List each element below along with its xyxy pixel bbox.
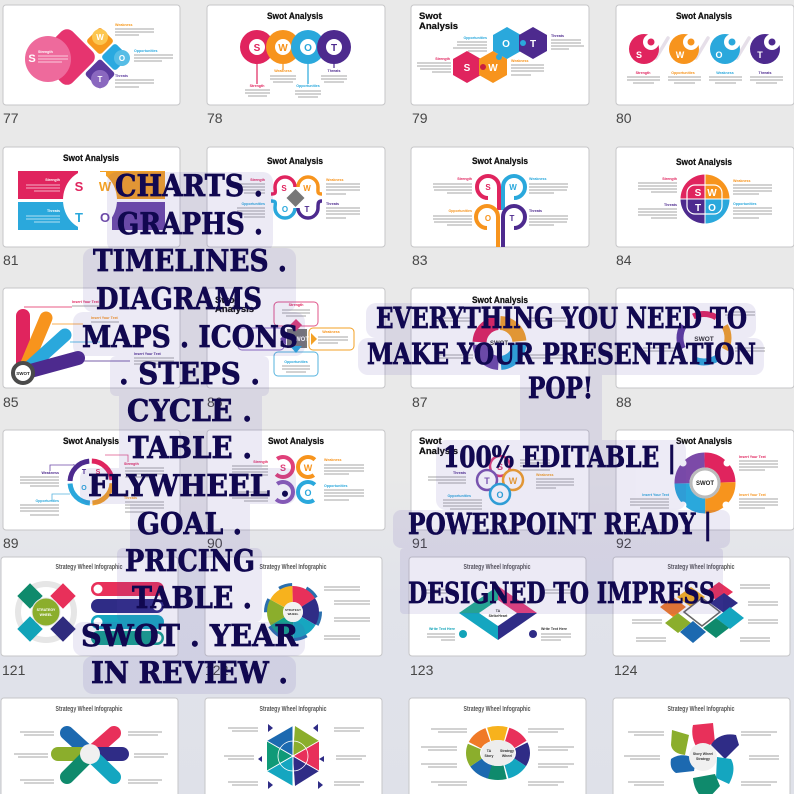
label 77: 77 [3, 110, 19, 126]
slide 81: banner quadrants: T [75, 210, 83, 225]
slide 85: swot fan: Insert Your Text [91, 316, 119, 320]
slide 82: curved swot: Opportunities [241, 202, 265, 206]
slide 90: arcs: Swot Analysis [268, 436, 324, 447]
slide 78: four linked circles: S [254, 43, 261, 54]
slide 84: quadrant circle: S [695, 188, 702, 199]
slide 90: arcs: S [280, 463, 286, 473]
slide 86: connected boxes: SWOT [291, 337, 309, 343]
slide 127: oval segments: Wheel [502, 754, 512, 758]
slide 128: swirl blades [613, 698, 790, 794]
slide 79: hexagons: Opportunities [463, 36, 487, 40]
slide 92: swot donut [616, 430, 794, 530]
slide 85: swot fan [3, 288, 180, 388]
slide 78: four linked circles: W [278, 43, 288, 54]
right headline: value proposition: POWERPOINT READY | [408, 507, 712, 541]
label 123: 123 [410, 662, 434, 678]
slide 79: hexagons: T [530, 39, 536, 50]
slide 81: banner quadrants: Strength [45, 178, 60, 182]
left headline: product contents list: DIAGRAMS [96, 281, 262, 316]
translucent highlight behind headline text [73, 172, 764, 694]
right headline: value proposition: 100% EDITABLE | [443, 440, 676, 474]
slide 127: oval segments [409, 698, 586, 794]
slide 79: hexagons: O [502, 39, 510, 50]
slide 89: ring with callouts: Strength [124, 462, 139, 466]
label 122: 122 [205, 662, 229, 678]
slide 81: banner quadrants: W [99, 179, 112, 194]
left headline: product contents list: MAPS . ICONS [82, 319, 298, 354]
slide 83: tree swirls: Weakness [529, 177, 547, 181]
slide 90: arcs: Opportunities [324, 484, 348, 488]
label 87: 87 [412, 394, 428, 410]
slide 79: hexagons: Strength [435, 57, 450, 61]
slide 84: quadrant circle: Opportunities [733, 202, 757, 206]
label 124: 124 [614, 662, 638, 678]
slide 124: tiled diamonds [613, 557, 790, 656]
slide 80: circles with arrows: S [636, 50, 642, 60]
slide 85: swot fan: SWOT [16, 371, 30, 376]
slide 89: ring with callouts: Opportunities [35, 499, 59, 503]
slide 82: curved swot: Threats [326, 202, 339, 206]
left headline: product contents list: CHARTS . [115, 168, 263, 203]
slide 83: tree swirls: Threats [529, 209, 542, 213]
slide 81: banner quadrants: S [75, 179, 84, 194]
left headline: product contents list: IN REVIEW . [91, 655, 288, 690]
label 89: 89 [3, 535, 19, 551]
slide 77: layered shapes: Strength [38, 50, 53, 54]
label 81: 81 [3, 252, 19, 268]
slide 77: layered shapes: Opportunities [134, 49, 158, 53]
slide 77: layered shapes: W [96, 33, 104, 42]
slide 83: tree swirls: Swot Analysis [472, 156, 528, 167]
slide 122: gear wheel: STRATEGY [285, 608, 301, 612]
slide 79: hexagons: Threats [551, 34, 564, 38]
slide 89: ring with callouts: Weakness [41, 471, 59, 475]
slide 78: four linked circles: Swot Analysis [267, 11, 323, 22]
left headline: product contents list: CYCLE . [127, 393, 252, 428]
slide 128: swirl blades: Strategy Wheel Infographic [668, 704, 734, 713]
slide 84: quadrant circle: W [707, 188, 717, 199]
slide 80: circles with arrows: O [715, 50, 723, 60]
slide 78: four linked circles: Strength [250, 84, 264, 88]
slide 122: gear wheel: Strategy Wheel Infographic [260, 562, 326, 571]
slide 82: curved swot: S [281, 184, 287, 193]
slide 78: four linked circles [207, 5, 385, 105]
label 121: 121 [2, 662, 26, 678]
slide 125: six petals: Strategy Wheel Infographic [56, 704, 122, 713]
slide 128: swirl blades: Story Wheel [693, 752, 713, 756]
slide 92: swot donut: Swot Analysis [676, 436, 732, 447]
slide 91: four petals: Threats [453, 471, 466, 475]
slide 80: circles with arrows: Strength [636, 71, 650, 75]
slide 88: arrows ring [616, 288, 794, 388]
slide 123: diamond frame: TA [496, 609, 501, 613]
slide 79: hexagons: W [488, 63, 498, 74]
label 79: 79 [412, 110, 428, 126]
slide 122: gear wheel: WHEEL [288, 612, 299, 616]
slide 80: circles with arrows: Opportunities [671, 71, 695, 75]
slide 78: four linked circles: Threats [328, 69, 340, 73]
left headline: product contents list: TABLE . [128, 430, 252, 465]
slide 81: banner quadrants [3, 147, 180, 247]
slide 86: connected boxes: Swot [215, 295, 239, 306]
slide 84: quadrant circle: T [695, 203, 701, 214]
slide 91: four petals: O [496, 490, 504, 500]
slide 86: connected boxes [207, 288, 385, 388]
slide 83: tree swirls: Opportunities [448, 209, 472, 213]
slide 83: tree swirls [411, 147, 589, 247]
left headline: product contents list: FLYWHEEL . [88, 468, 290, 503]
slide 86: connected boxes: Analysis [215, 304, 254, 315]
slide 123: diamond frame: StrikeHeart [489, 614, 508, 618]
left headline: product contents list: SWOT . YEAR [81, 618, 298, 653]
slide 125: six petals [1, 698, 178, 794]
slide 80: circles with arrows [616, 5, 794, 105]
slide 126: hexagon wheel: Strategy Wheel Infographic [260, 704, 326, 713]
label 84: 84 [616, 252, 632, 268]
slide 89: ring with callouts: T [82, 469, 87, 476]
left headline: product contents list: TIMELINES . [93, 243, 287, 278]
slide 77: layered shapes: T [98, 75, 103, 84]
left headline: product contents list: GOAL . [137, 506, 242, 541]
label 90: 90 [207, 535, 223, 551]
label 78: 78 [207, 110, 223, 126]
slide 87: broken donut: Swot Analysis [472, 295, 528, 306]
label 85: 85 [3, 394, 19, 410]
slide 78: four linked circles: T [331, 43, 337, 54]
label 83: 83 [412, 252, 428, 268]
slide 123: diamond frame [409, 557, 586, 656]
slide 79: hexagons: Swot [419, 11, 443, 22]
slide 86: connected boxes: Weakness [322, 330, 340, 334]
slide 77: layered shapes: O [119, 54, 125, 63]
slide 78: four linked circles: Weakness [274, 69, 292, 73]
slide 123: diamond frame: Strategy Wheel Infographic [464, 562, 530, 571]
slide 89: ring with callouts: O [81, 485, 87, 492]
slide 90: arcs: W [304, 463, 313, 473]
slide 88: arrows ring: SWOT [694, 336, 714, 343]
slide 87: broken donut: SWOT [490, 341, 508, 347]
slide 91: four petals: Swot [419, 436, 443, 447]
slide 78: four linked circles: Opportunities [296, 84, 320, 88]
slide 85: swot fan: Insert Your Text [72, 300, 100, 304]
slide 91: four petals [411, 430, 589, 530]
slide 83: tree swirls: W [509, 183, 517, 192]
slide 85: swot fan: Insert Your Text [134, 352, 162, 356]
label 88: 88 [616, 394, 632, 410]
left headline: product contents list: PRICING [125, 543, 255, 578]
slide 80: circles with arrows: Weakness [716, 71, 734, 75]
slide 82: curved swot: Swot Analysis [267, 156, 323, 167]
slide 90: arcs: O [304, 488, 312, 498]
slide 127: oval segments: TA [487, 749, 492, 753]
slide 121: strategy wheel with pills: WHEEL [40, 613, 53, 617]
slide 84: quadrant circle: Weakness [733, 179, 751, 183]
slide 84: quadrant circle: Threats [664, 203, 677, 207]
slide 89: ring with callouts [3, 430, 180, 530]
slide 127: oval segments: Strategy [500, 749, 514, 753]
slide 79: hexagons: S [464, 63, 471, 74]
slide 123: diamond frame: Write Text Here [541, 627, 567, 631]
slide 82: curved swot: Strength [250, 178, 265, 182]
slide 90: arcs: Strength [253, 460, 268, 464]
slide 124: tiled diamonds: Strategy Wheel Infographic [668, 562, 734, 571]
slide 91: four petals: Analysis [419, 446, 458, 457]
slide 82: curved swot [207, 147, 385, 247]
slide 81: banner quadrants: Threats [47, 209, 60, 213]
slide 86: connected boxes: Opportunities [284, 360, 308, 364]
slide 83: tree swirls: S [485, 183, 491, 192]
slide 83: tree swirls: T [510, 214, 515, 223]
slide 127: oval segments: Strategy Wheel Infographic [464, 704, 530, 713]
slide 79: hexagons: Weakness [511, 59, 529, 63]
right headline: value proposition: DESIGNED TO IMPRESS [408, 576, 715, 610]
left headline: product contents list: . STEPS . [119, 356, 260, 391]
slide 90: arcs: Weakness [324, 458, 342, 462]
slide 91: four petals: W [509, 476, 518, 486]
slide 80: circles with arrows: W [676, 50, 685, 60]
slide 89: ring with callouts: Threats [124, 496, 137, 500]
right headline: value proposition [367, 301, 756, 610]
slide 83: tree swirls: O [485, 214, 491, 223]
slide 90: arcs [207, 430, 385, 530]
slide 89: ring with callouts: Swot Analysis [63, 436, 119, 447]
slide 82: curved swot: W [303, 184, 311, 193]
slide 80: circles with arrows: T [757, 50, 763, 60]
slide 77: layered shapes: S [28, 53, 36, 65]
slide 79: hexagons [411, 5, 589, 105]
slide 80: circles with arrows: Swot Analysis [676, 11, 732, 22]
slide 79: hexagons: Analysis [419, 21, 458, 32]
left headline: product contents list: TABLE . [132, 580, 252, 615]
slide 91: four petals: Opportunities [447, 494, 471, 498]
slide 80: circles with arrows: Threats [759, 71, 771, 75]
slide 82: curved swot: O [282, 205, 288, 214]
slide 84: quadrant circle [616, 147, 794, 247]
slide 91: four petals: S [497, 462, 503, 472]
left headline: product contents list [81, 168, 298, 690]
slide 121: strategy wheel with pills [1, 557, 178, 656]
label 91: 91 [412, 535, 428, 551]
slide 84: quadrant circle: Swot Analysis [676, 157, 732, 168]
slide 128: swirl blades: Strategy [696, 757, 710, 761]
slide 77: layered shapes: Threats [115, 74, 128, 78]
slide 92: swot donut: SWOT [696, 481, 714, 487]
slide 81: banner quadrants: Swot Analysis [63, 153, 119, 164]
slide 82: curved swot: Weakness [326, 178, 344, 182]
slide 87: broken donut [411, 288, 589, 388]
slide 121: strategy wheel with pills: STRATEGY [37, 608, 56, 612]
slide 126: hexagon wheel [205, 698, 382, 794]
right headline: value proposition: POP! [528, 371, 593, 405]
left headline: product contents list: GRAPHS . [117, 206, 263, 241]
slide 92: swot donut: Insert Your Text [739, 493, 767, 497]
slide 92: swot donut: Insert Your Text [739, 455, 767, 459]
slide 82: curved swot: T [305, 205, 310, 214]
slide 77: layered shapes [3, 5, 180, 105]
slide 84: quadrant circle: Strength [662, 177, 677, 181]
label 92: 92 [616, 535, 632, 551]
slide 83: tree swirls: Strength [457, 177, 472, 181]
slide 86: connected boxes: Strength [289, 303, 303, 307]
slide 81: banner quadrants: O [100, 210, 110, 225]
slide 92: swot donut: Insert Your Text [642, 493, 670, 497]
slide 84: quadrant circle: O [708, 203, 716, 214]
slide 121: strategy wheel with pills: Strategy Wheel Infographic [56, 562, 122, 571]
slide 91: four petals: Weakness [536, 473, 554, 477]
slide 89: ring with callouts: S [96, 469, 101, 476]
slide 77: layered shapes: Weakness [115, 23, 133, 27]
slide 127: oval segments: Story [485, 754, 494, 758]
label 86: 86 [207, 394, 223, 410]
slide 122: gear wheel [205, 557, 382, 656]
slide 123: diamond frame: Write Text Here [429, 627, 455, 631]
slide 78: four linked circles: O [304, 43, 312, 54]
label 80: 80 [616, 110, 632, 126]
slide 91: four petals: T [484, 476, 490, 486]
